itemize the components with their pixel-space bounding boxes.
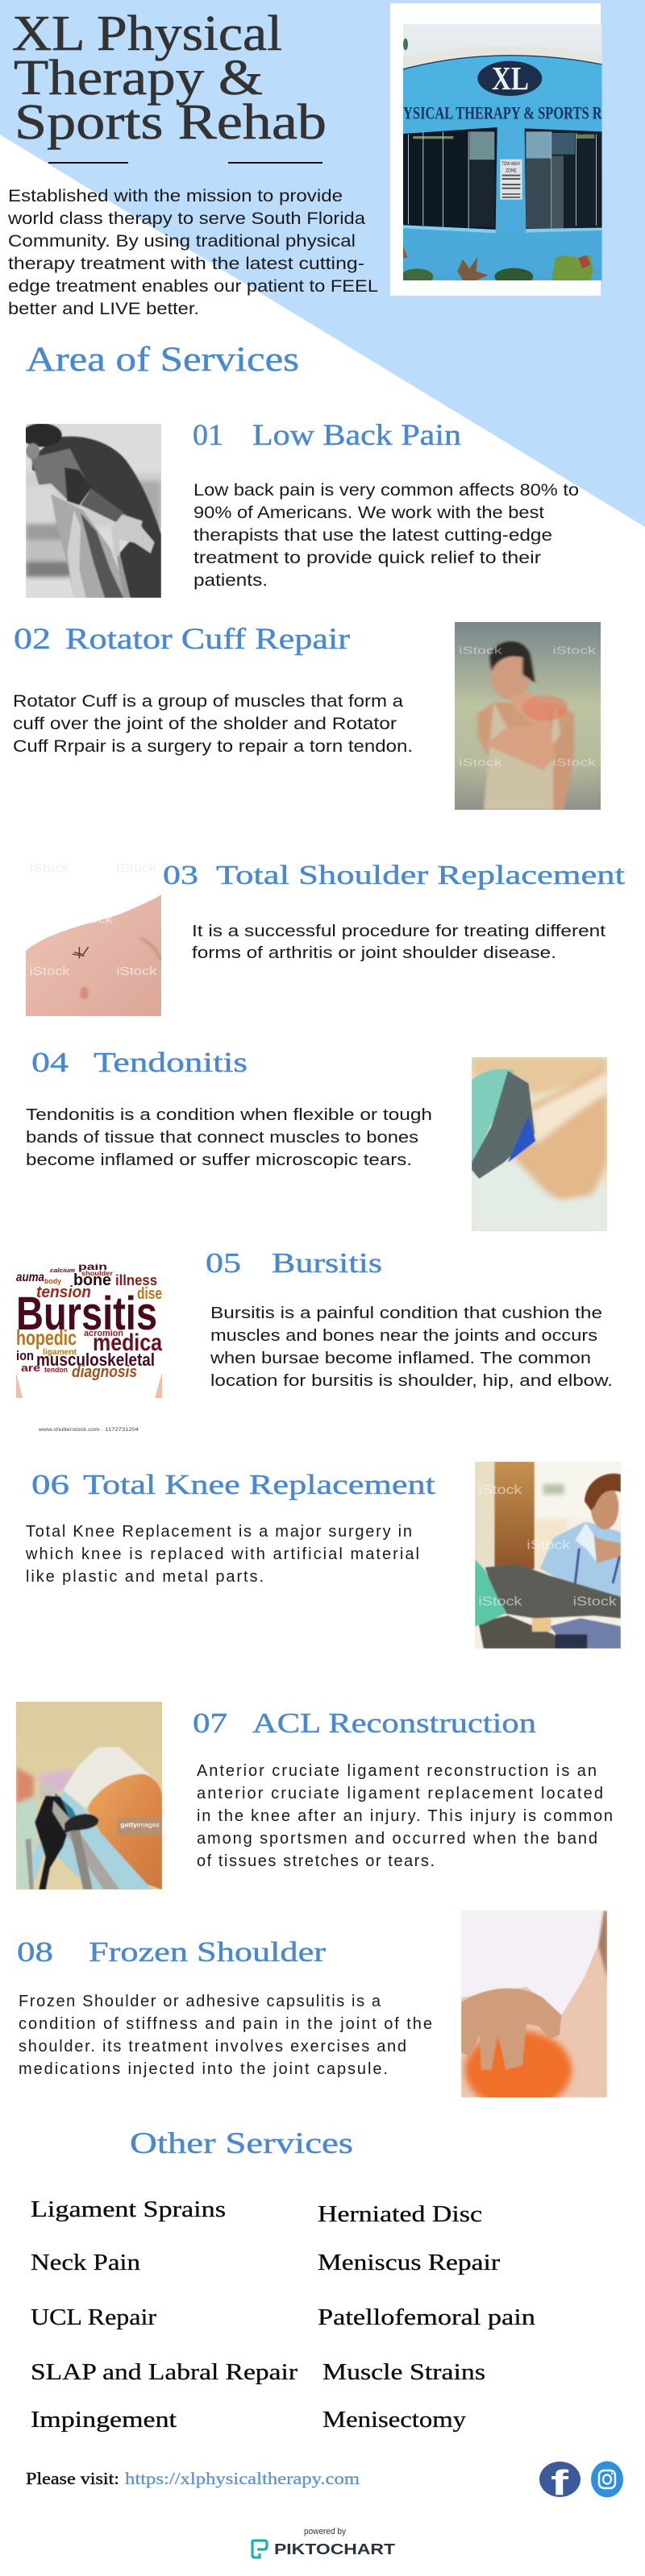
photo: ultrasound therapy on elbow [472, 1057, 607, 1231]
photo: woman holding neck: iStock [459, 756, 502, 769]
section 03: total shoulder replacement [163, 861, 626, 962]
photo: bursitis word cloud: hopedic [16, 1325, 77, 1350]
photo: nurse examining patient leg: iStock [478, 1483, 522, 1497]
photo: bursitis word cloud: body [44, 1277, 61, 1285]
powered by piktochart logo [252, 2527, 395, 2557]
heading 03 [163, 861, 626, 890]
description 04: Tendonitis is a condition when flexible or tough [26, 1106, 432, 1124]
description 05 [210, 1305, 613, 1390]
description 01: therapists that use the latest cutting-edge [194, 526, 552, 545]
description 08: shoulder. its treatment involves exercises and [19, 2038, 406, 2055]
photo: shoulder with stitches: iStock [116, 862, 157, 875]
list: other services right column: Menisectomy [322, 2407, 467, 2433]
photo: knee in surgical brace: gettyimages [120, 1821, 160, 1828]
section 05: bursitis [206, 1247, 613, 1390]
description 01: patients. [194, 571, 268, 590]
description 04 [26, 1106, 432, 1169]
icon: facebook [539, 2462, 580, 2503]
heading: area of services: Area of Services [26, 341, 299, 379]
website link: Please visit: [26, 2469, 119, 2488]
heading 04 [31, 1047, 248, 1078]
photo: woman holding neck: iStock [552, 756, 597, 769]
photo: nurse examining patient leg [475, 1462, 621, 1649]
heading 06 [31, 1469, 435, 1500]
website link [26, 2469, 360, 2488]
description 01: treatment to provide quick relief to their [194, 549, 541, 567]
icon: instagram [591, 2461, 623, 2498]
photo: shoulder with stitches: iStock [30, 862, 70, 875]
photo: bursitis word cloud: tendon [44, 1366, 68, 1374]
description 05: muscles and bones near the joints and occurs [210, 1327, 597, 1345]
photo: woman holding neck: iStock [459, 645, 502, 657]
website link: https://xlphysicaltherapy.com [125, 2469, 360, 2488]
heading 08: 08 [17, 1936, 53, 1968]
description 06: Total Knee Replacement is a major surgery in [26, 1523, 412, 1541]
description 06: which knee is replaced with artificial material [25, 1545, 419, 1563]
heading 05 [206, 1247, 382, 1279]
title: Therapy & [14, 51, 263, 106]
list: other services right column: Herniated Disc [318, 2201, 482, 2227]
heading 07 [193, 1707, 536, 1739]
section 02: rotator cuff repair [13, 623, 413, 756]
description 01: Low back pain is very common affects 80% to [194, 481, 579, 500]
heading 08: Frozen Shoulder [89, 1936, 326, 1968]
section 04: tendonitis [26, 1047, 432, 1169]
photo: hand on painful shoulder [461, 1910, 607, 2097]
icon: facebook: f [551, 2463, 569, 2503]
heading 01: Low Back Pain [252, 419, 461, 452]
photo: man holding low back [26, 424, 161, 598]
photo: nurse examining patient leg: iStock [478, 1595, 522, 1608]
description 07: Anterior cruciate ligament reconstruction is an [197, 1762, 597, 1780]
intro text block: Community. By using traditional physical [8, 232, 356, 251]
photo: woman holding neck: iStock [552, 645, 597, 657]
photo: bursitis word cloud: illness [115, 1272, 157, 1288]
photo: shoulder with stitches: iStock [30, 965, 70, 978]
description 08 [19, 1993, 432, 2078]
list: other services left column: SLAP and Labral Repair [31, 2359, 298, 2385]
list: other services right column: Meniscus Repair [318, 2250, 500, 2275]
description 04: become inflamed or suffer microscopic tears. [26, 1151, 412, 1169]
heading 01: 01 [193, 419, 223, 452]
title [12, 6, 327, 150]
description 01 [194, 481, 579, 590]
intro text block: therapy treatment with the latest cutting- [8, 255, 364, 273]
heading 05: 05 [206, 1247, 241, 1279]
description 05: location for bursitis is shoulder, hip, and elbow. [210, 1372, 613, 1390]
intro text block: better and LIVE better. [8, 300, 199, 318]
heading 02: 02 [14, 623, 51, 656]
section 08: frozen shoulder [17, 1936, 432, 2078]
intro text block: Established with the mission to provide [8, 187, 343, 205]
photo: woman holding neck [455, 622, 601, 810]
photo: bursitis word cloud: pain [78, 1261, 107, 1272]
description 02 [13, 692, 413, 756]
section 06: total knee replacement [25, 1469, 435, 1586]
intro text block: world class therapy to serve South Florida [7, 209, 365, 228]
photo: bursitis word cloud: bone [73, 1271, 111, 1289]
heading 01 [193, 419, 461, 452]
photo: bursitis word cloud: are [21, 1362, 40, 1374]
description 06: like plastic and metal parts. [26, 1568, 264, 1586]
heading 02: Rotator Cuff Repair [65, 623, 350, 656]
title: Sports Rehab [15, 95, 327, 150]
list: other services left column: Ligament Sprains [31, 2196, 226, 2222]
photo: clinic building front: XL [492, 60, 529, 97]
photo: bursitis word cloud: auma [16, 1271, 44, 1284]
list: other services left column: Impingement [31, 2407, 177, 2433]
list: other services right column: Patellofemoral pain [318, 2304, 536, 2330]
photo: clinic building front: TOW AWAY [501, 161, 521, 167]
heading 03: Total Shoulder Replacement [216, 861, 626, 890]
description 07: anterior cruciate ligament replacement located [197, 1785, 603, 1802]
photo: clinic building front [390, 3, 602, 296]
description 07: of tissues stretches or tears. [197, 1852, 435, 1870]
heading 05: Bursitis [272, 1247, 382, 1279]
description 08: medications injected into the joint capsule. [19, 2060, 388, 2078]
photo: nurse examining patient leg: iStock [526, 1538, 571, 1552]
photo: clinic building front: ZONE [506, 168, 517, 173]
section 01: low back pain [193, 419, 579, 590]
photo: knee in surgical brace [16, 1702, 162, 1889]
powered by piktochart logo: PIKTOCHART [274, 2541, 395, 2557]
photo: bursitis word cloud: shoulder [81, 1270, 113, 1277]
description 03 [192, 923, 606, 962]
photo: bursitis word cloud: ion [16, 1348, 34, 1363]
description 08: condition of stiffness and pain in the joint of the [19, 2015, 432, 2033]
description 01: 90% of Americans. We work with the best [194, 504, 544, 522]
powered by piktochart logo: powered by [304, 2527, 346, 2537]
image credit caption: www.shutterstock.com · 1172731204 [38, 1427, 139, 1433]
intro text block [7, 187, 378, 318]
description 07: in the knee after an injury. This injury is common [197, 1807, 613, 1825]
background: blue diagonal shape [0, 0, 645, 527]
description 02: cuff over the joint of the sholder and Rotator [13, 715, 397, 733]
photo: shoulder with stitches: iStock [73, 914, 113, 926]
section 07: acl reconstruction [193, 1707, 613, 1870]
photo: bursitis word cloud: ligament [43, 1348, 77, 1357]
photo: shoulder with stitches: iStock [116, 965, 157, 978]
intro text block: edge treatment enables our patient to FEEL [8, 277, 378, 296]
heading 07: ACL Reconstruction [252, 1707, 536, 1739]
photo: bursitis word cloud [16, 1261, 162, 1398]
heading 04: 04 [31, 1047, 69, 1078]
list: other services left column [31, 2196, 298, 2433]
photo: bursitis word cloud: acromion [84, 1329, 123, 1338]
description 05: when bursae become inflamed. The common [210, 1350, 591, 1367]
heading 06: 06 [31, 1469, 69, 1500]
photo: bursitis word cloud: calcium [50, 1268, 75, 1274]
list: other services right column [318, 2201, 536, 2433]
description 08: Frozen Shoulder or adhesive capsulitis is a [19, 1993, 381, 2010]
list: other services left column: Neck Pain [31, 2250, 141, 2275]
description 03: It is a successful procedure for treating different [192, 923, 606, 940]
photo: nurse examining patient leg: iStock [573, 1595, 617, 1608]
heading 04: Tendonitis [94, 1047, 248, 1078]
description 05: Bursitis is a painful condition that cushion the [210, 1305, 602, 1322]
heading 03: 03 [163, 861, 198, 890]
list: other services right column: Muscle Strains [322, 2359, 485, 2385]
heading 08 [17, 1936, 326, 1968]
description 02: Rotator Cuff is a group of muscles that form a [13, 692, 403, 711]
heading 06: Total Knee Replacement [83, 1469, 435, 1500]
description 03: forms of arthritis or joint shoulder disease. [192, 944, 556, 962]
heading: other services: Other Services [130, 2127, 353, 2160]
heading 07: 07 [193, 1707, 227, 1739]
description 06 [25, 1523, 419, 1586]
list: other services left column: UCL Repair [31, 2304, 156, 2330]
description 04: bands of tissue that connect muscles to bones [26, 1129, 418, 1147]
photo: bursitis word cloud: tension [36, 1284, 91, 1301]
photo: bursitis word cloud: diagnosis [72, 1363, 137, 1381]
title: XL Physical [12, 6, 282, 61]
description 02: Cuff Rrpair is a surgery to repair a torn tendon. [13, 737, 413, 756]
photo: shoulder with stitches [26, 862, 161, 1016]
description 07 [197, 1762, 613, 1870]
description 07: among sportsmen and occurred when the band [197, 1830, 597, 1848]
